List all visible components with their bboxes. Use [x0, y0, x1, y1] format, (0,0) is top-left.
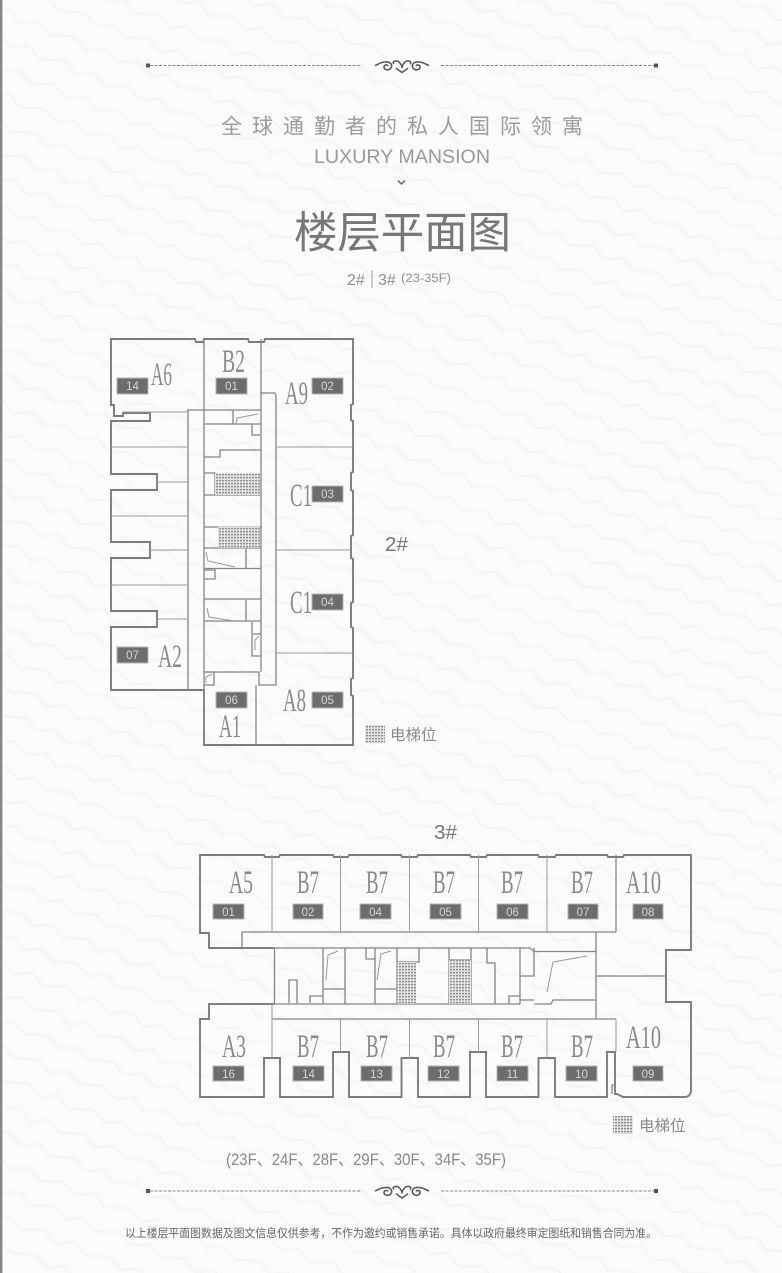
- subtitle: 2#: [347, 272, 365, 289]
- unit B2 01: [216, 344, 247, 394]
- unit A10 08: [626, 865, 663, 919]
- unit A5 01: [213, 865, 253, 919]
- unit A10 08: 08: [642, 907, 654, 919]
- unit B7 13: B7: [366, 1029, 388, 1065]
- subtitle: [347, 270, 451, 289]
- unit A1 06: 06: [225, 695, 238, 707]
- unit B7 14: 14: [302, 1069, 315, 1081]
- unit B7 05: 05: [439, 907, 452, 919]
- unit B7 04: 04: [369, 907, 382, 919]
- unit A6 14: 14: [126, 381, 139, 393]
- unit A10 08: A10: [626, 865, 661, 901]
- unit B7 11: B7: [501, 1029, 523, 1065]
- unit B2 01: 01: [225, 381, 238, 393]
- unit A2 07: A2: [158, 639, 182, 675]
- unit A9 02: 02: [321, 381, 334, 393]
- unit A9 02: A9: [285, 376, 308, 412]
- unit A9 02: [285, 376, 343, 412]
- unit A8 05: A8: [283, 683, 306, 719]
- floor plan: building 3: [200, 855, 691, 1097]
- building 3 corridors and partitions: [209, 855, 666, 1094]
- unit B7 11: 11: [507, 1069, 518, 1081]
- subtitle: (23-35F): [401, 273, 451, 285]
- unit A10 09: [626, 1020, 663, 1081]
- main title: 楼层平面图: [294, 210, 511, 258]
- unit B7 04: B7: [366, 865, 388, 901]
- chevron: [398, 180, 405, 184]
- unit A3 16: [213, 1029, 246, 1081]
- unit B7 12: B7: [433, 1029, 455, 1065]
- floor plan: building 2: [111, 339, 353, 745]
- unit B7 02: 02: [302, 907, 314, 919]
- building 3 outer walls: [200, 855, 691, 1097]
- unit B7 05: B7: [433, 865, 455, 901]
- legend: elevator, building 3: 电梯位: [639, 1117, 686, 1135]
- unit A8 05: [283, 683, 343, 719]
- tagline chinese: 全球通勤者的私人国际领寓: [221, 116, 583, 138]
- building 3 elevators: [397, 960, 471, 1004]
- building 3 label: 3#: [434, 822, 458, 844]
- unit A5 01: A5: [229, 865, 253, 901]
- unit B7 04: [360, 865, 391, 919]
- unit A1 06: A1: [219, 709, 241, 745]
- floors note: (23F、24F、28F、29F、30F、34F、35F): [226, 1150, 506, 1169]
- unit A6 14: A6: [151, 357, 172, 393]
- unit B7 06: 06: [506, 907, 519, 919]
- legend: elevator, building 2: [365, 725, 437, 744]
- unit A3 16: A3: [222, 1029, 246, 1065]
- unit B7 13: [361, 1029, 392, 1081]
- bottom ornamental divider: [146, 1186, 658, 1198]
- left edge bar: [0, 0, 2, 1273]
- unit B7 10: [566, 1029, 597, 1081]
- unit B7 02: B7: [297, 865, 319, 901]
- tagline english: LUXURY MANSION: [314, 146, 490, 168]
- building 2 elevators: [215, 473, 260, 548]
- legend: elevator, building 2: 电梯位: [390, 726, 437, 744]
- unit B7 06: B7: [501, 865, 523, 901]
- unit A1 06: [216, 692, 247, 745]
- unit A10 09: 09: [642, 1069, 654, 1081]
- unit B7 02: [293, 865, 323, 919]
- unit C1 04: C1: [290, 585, 312, 621]
- unit B7 12: 12: [437, 1069, 450, 1081]
- unit B7 06: [497, 865, 528, 919]
- building 2 label: 2#: [385, 534, 409, 556]
- unit A5 01: 01: [222, 907, 235, 919]
- unit B7 14: B7: [297, 1029, 319, 1065]
- unit B7 11: [497, 1029, 528, 1081]
- unit C1 03: 03: [321, 489, 334, 501]
- disclaimer: 以上楼层平面图数据及图文信息仅供参考，不作为邀约或销售承诺。具体以政府最终审定图纸和销售合同为准。: [125, 1226, 657, 1240]
- unit B7 10: 10: [575, 1069, 588, 1081]
- unit B7 07: B7: [571, 865, 593, 901]
- legend: elevator, building 3: [613, 1116, 686, 1135]
- unit A6 14: [117, 357, 172, 394]
- building 2 corridors and partitions: [111, 339, 353, 745]
- unit C1 04: 04: [321, 597, 334, 609]
- unit B2 01: B2: [222, 344, 245, 380]
- unit B7 10: B7: [571, 1029, 593, 1065]
- unit A10 09: A10: [626, 1020, 661, 1056]
- top ornamental divider: [146, 61, 658, 72]
- unit B7 07: [568, 865, 598, 919]
- unit B7 13: 13: [370, 1069, 383, 1081]
- unit B7 07: 07: [577, 907, 589, 919]
- unit A2 07: [117, 639, 182, 675]
- building 2 outer walls: [111, 339, 353, 745]
- unit B7 14: [293, 1029, 324, 1081]
- unit A2 07: 07: [126, 650, 139, 662]
- unit A8 05: 05: [321, 695, 334, 707]
- unit A3 16: 16: [222, 1069, 235, 1081]
- unit C1 03: C1: [290, 478, 312, 514]
- unit B7 12: [428, 1029, 459, 1081]
- unit B7 05: [430, 865, 461, 919]
- subtitle: 3#: [378, 272, 396, 289]
